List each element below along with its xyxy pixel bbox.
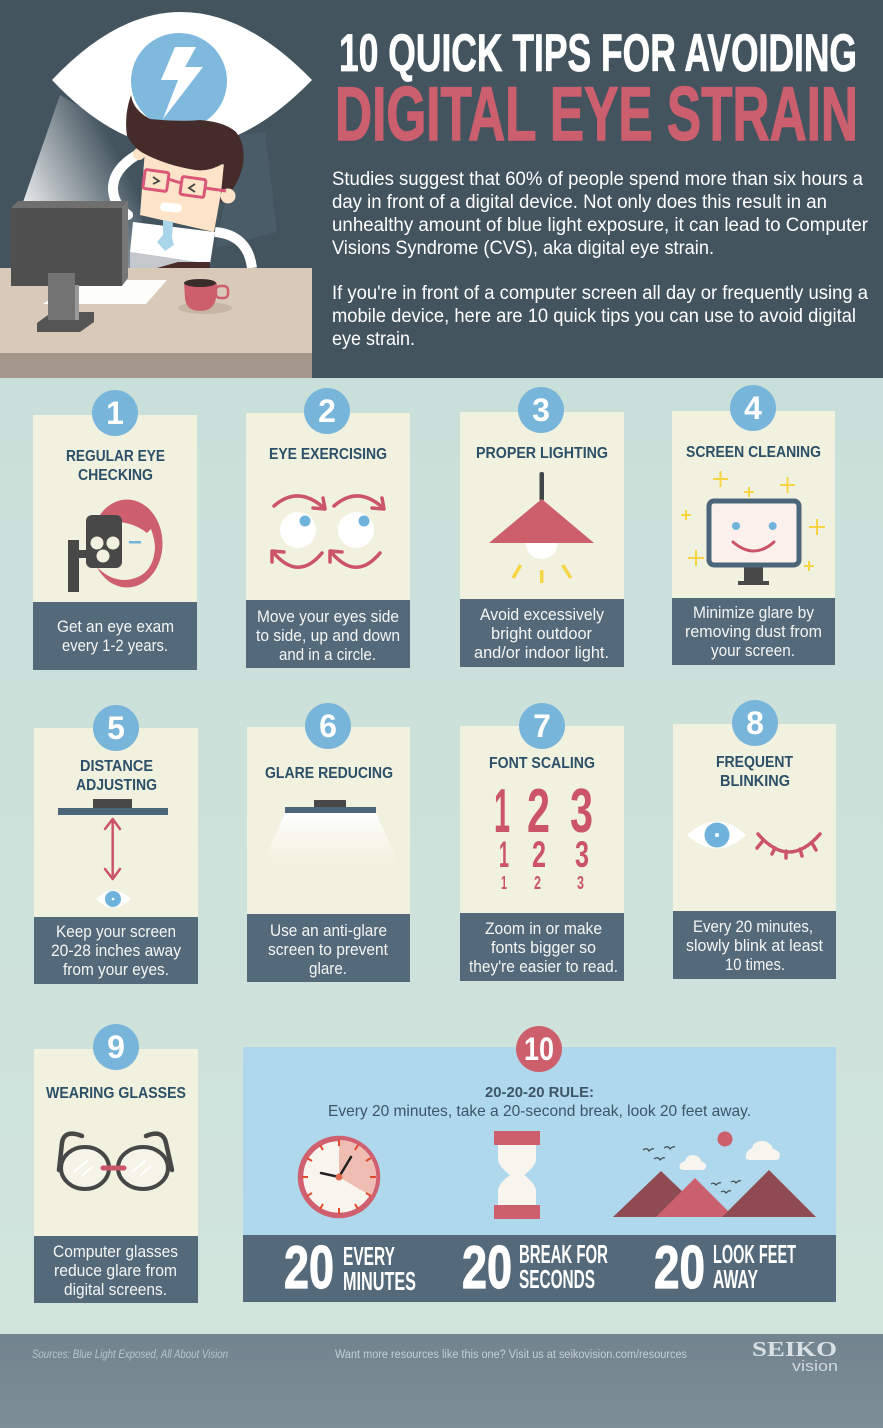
icon: scaled numbers: 2 [527, 777, 550, 846]
icon: scaled numbers: 1 [501, 873, 507, 893]
panel: tip 5 [34, 705, 198, 984]
panel: tip 6: GLARE REDUCING [265, 765, 393, 782]
panel: tip 8: BLINKING [720, 773, 790, 790]
panel: tip 5: from your eyes. [63, 961, 169, 979]
title [335, 24, 858, 157]
panel: tip 2: 2 [318, 393, 336, 429]
stat: 20 look feet away [654, 1234, 796, 1301]
panel: tip 6 [247, 703, 410, 982]
panel: tip 3: bright outdoor [491, 625, 592, 643]
icon: coffee cup [178, 279, 232, 314]
stat: 20 look feet away: AWAY [713, 1264, 758, 1294]
icon: glasses [59, 1134, 172, 1189]
icon: screen distance arrow and eye [58, 799, 168, 908]
panel: tip 5: 20-28 inches away [51, 942, 182, 960]
icon: scaled numbers: 2 [534, 873, 541, 893]
icon: eye exam machine [68, 500, 162, 592]
icon: open and closed eye [687, 822, 820, 858]
panel: tip 5: DISTANCE [80, 758, 153, 775]
icon: screen with glare [262, 800, 400, 866]
icon: mountains, sun, clouds and birds [613, 1132, 816, 1217]
stat: 20 every minutes [284, 1234, 416, 1301]
desk [0, 268, 312, 378]
intro text: unhealthy amount of blue light exposure, it can lead to Computer [332, 215, 869, 236]
panel: tip 5: 5 [107, 710, 125, 746]
icon: smiling clean monitor [681, 471, 825, 585]
panel: tip 9: digital screens. [64, 1281, 167, 1299]
panel: tip 3: 3 [532, 392, 550, 428]
panel: tip 10, 20-20-20 rule: 10 [524, 1031, 554, 1067]
page background [0, 378, 883, 1334]
panel: tip 5: Keep your screen [56, 923, 176, 941]
icon: ceiling lamp [489, 472, 594, 583]
computer monitor [11, 201, 128, 332]
panel: tip 6: glare. [309, 960, 347, 978]
icon: scaled numbers [494, 777, 593, 893]
panel: tip 1 [33, 390, 197, 670]
stat: 20 every minutes: MINUTES [343, 1266, 416, 1296]
cloud: small [680, 1155, 706, 1170]
icon: hourglass [494, 1131, 540, 1219]
stat: 20 break for seconds: BREAK FOR [519, 1239, 608, 1269]
illustration: stressed man at computer [0, 12, 312, 378]
panel: tip 7: fonts bigger so [491, 939, 596, 957]
intro text: mobile device, here are 10 quick tips you can use to avoid digital [332, 306, 856, 327]
paper [43, 280, 167, 304]
intro text: Visions Syndrome (CVS), aka digital eye strain. [332, 238, 714, 259]
icon: clock [300, 1138, 378, 1216]
panel: tip 8: 8 [746, 705, 764, 741]
panel: tip 3: PROPER LIGHTING [476, 445, 608, 462]
panel: tip 8: 10 times. [725, 956, 785, 974]
stat: 20 break for seconds: 20 [462, 1234, 512, 1301]
stat: 20 every minutes: 20 [284, 1234, 334, 1301]
panel: tip 3: Avoid excessively [480, 606, 605, 624]
panel: tip 8: slowly blink at least [686, 937, 823, 955]
panel: tip 9 [34, 1024, 198, 1303]
panel: tip 2: and in a circle. [279, 646, 376, 664]
stat: 20 break for seconds [462, 1234, 608, 1301]
panel: tip 3 [460, 387, 624, 667]
panel: tip 7 [460, 703, 624, 981]
panel: tip 4: SCREEN CLEANING [686, 444, 821, 461]
stat: 20 look feet away: LOOK FEET [713, 1239, 796, 1269]
panel: tip 1: CHECKING [78, 467, 153, 484]
footer: Want more resources like this one? Visit us at seikovision.com/resources [335, 1349, 687, 1361]
panel: tip 2: EYE EXERCISING [269, 446, 387, 463]
panel: tip 10, 20-20-20 rule [243, 1026, 836, 1302]
icon: scaled numbers: 1 [494, 777, 510, 846]
panel: tip 8: FREQUENT [716, 754, 793, 771]
cloud: large [746, 1141, 780, 1160]
panel: tip 10, 20-20-20 rule: Every 20 minutes, take a 20-second break, look 20 feet away. [328, 1103, 751, 1120]
logo: Seiko Vision: SEIKO [752, 1337, 837, 1361]
icon: scaled numbers: 3 [570, 777, 593, 846]
panel: tip 9: 9 [107, 1029, 125, 1065]
header panel [0, 0, 883, 378]
icon: eyes with rotating arrows [272, 496, 384, 567]
stat: 20 look feet away: 20 [654, 1234, 705, 1301]
panel: tip 7: Zoom in or make [485, 920, 602, 938]
logo: Seiko Vision [752, 1337, 838, 1375]
stat: 20 break for seconds: SECONDS [519, 1264, 595, 1294]
panel: tip 9: WEARING GLASSES [46, 1085, 186, 1102]
panel: tip 4: Minimize glare by [693, 604, 815, 622]
panel: tip 4: removing dust from [685, 623, 822, 641]
panel: tip 2: to side, up and down [256, 627, 400, 645]
intro text: Studies suggest that 60% of people spend more than six hours a [332, 169, 863, 190]
panel: tip 1: REGULAR EYE [66, 448, 165, 465]
panel: tip 10, 20-20-20 rule: 20-20-20 RULE: [485, 1084, 594, 1101]
panel: tip 6: screen to prevent [268, 941, 388, 959]
panel: tip 4 [672, 385, 835, 665]
logo: Seiko Vision: vision [792, 1358, 838, 1375]
panel: tip 7: they're easier to read. [469, 958, 618, 976]
footer [0, 1334, 883, 1428]
icon: eye with lightning bolt [52, 12, 312, 148]
icon: scaled numbers: 2 [532, 834, 546, 875]
panel: tip 6: 6 [319, 708, 337, 744]
panel: tip 4: your screen. [711, 642, 795, 660]
panel: tip 1: every 1-2 years. [62, 637, 168, 655]
intro text: day in front of a digital device. Not only does this result in an [332, 192, 827, 213]
screen light beam [22, 95, 150, 272]
icon: scaled numbers: 3 [577, 873, 584, 893]
panel: tip 1: 1 [106, 395, 124, 431]
panel: tip 3: and/or indoor light. [474, 644, 609, 662]
panel: tip 6: Use an anti-glare [270, 922, 387, 940]
panel: tip 8 [673, 700, 836, 979]
icon: scaled numbers: 3 [575, 834, 589, 875]
panel: tip 7: FONT SCALING [489, 755, 595, 772]
man figure [113, 95, 252, 272]
panel: tip 8: Every 20 minutes, [693, 918, 813, 936]
intro text: eye strain. [332, 329, 415, 350]
icon: scaled numbers: 1 [499, 834, 509, 875]
panel: tip 1: Get an eye exam [57, 618, 174, 636]
panel: tip 9: reduce glare from [54, 1262, 177, 1280]
panel: tip 9: Computer glasses [53, 1243, 178, 1261]
stat: 20 every minutes: EVERY [343, 1241, 395, 1271]
intro text: If you're in front of a computer screen all day or frequently using a [332, 283, 868, 304]
panel: tip 2: Move your eyes side [257, 608, 399, 626]
footer: Sources: Blue Light Exposed, All About Vision [32, 1349, 228, 1361]
panel: tip 5: ADJUSTING [76, 777, 157, 794]
panel: tip 7: 7 [533, 708, 551, 744]
panel: tip 2 [246, 388, 410, 668]
panel: tip 4: 4 [744, 390, 762, 426]
intro text [332, 169, 869, 350]
